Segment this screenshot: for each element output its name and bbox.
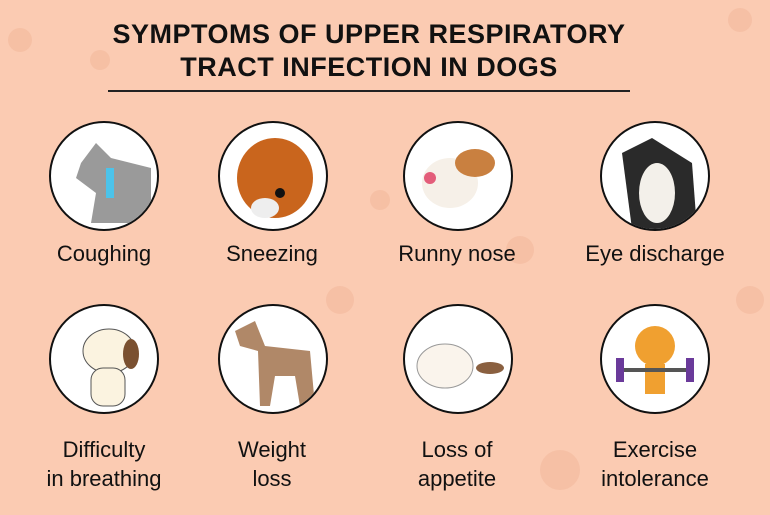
icon: coughing [49, 121, 159, 231]
icon: eye discharge [600, 121, 710, 231]
label: difficulty in breathing: in breathing [46, 466, 161, 491]
label: runny nose: Runny nose [398, 241, 516, 266]
icon: weight loss [218, 304, 328, 414]
icon: runny nose [403, 121, 513, 231]
title [112, 19, 626, 82]
title underline [108, 90, 630, 92]
label: loss of appetite: Loss of [422, 437, 492, 462]
label: loss of appetite [418, 437, 496, 491]
label: eye discharge: Eye discharge [585, 241, 725, 266]
label: sneezing: Sneezing [226, 241, 318, 266]
label: difficulty in breathing [46, 437, 161, 491]
icon: difficulty breathing [49, 304, 159, 414]
label: weight loss [238, 437, 306, 491]
icon: loss of appetite [403, 304, 513, 414]
label: coughing: Coughing [57, 241, 151, 266]
title: SYMPTOMS OF UPPER RESPIRATORY [112, 19, 626, 49]
label: difficulty in breathing: Difficulty [63, 437, 145, 462]
label: loss of appetite: appetite [418, 466, 496, 491]
icon: sneezing [218, 121, 328, 231]
icon: exercise intolerance [600, 304, 710, 414]
label: weight loss: Weight [238, 437, 306, 462]
title: TRACT INFECTION IN DOGS [180, 52, 558, 82]
label: weight loss: loss [252, 466, 292, 491]
label: exercise intolerance [601, 437, 709, 491]
label: exercise intolerance: intolerance [601, 466, 709, 491]
label: exercise intolerance: Exercise [613, 437, 697, 462]
